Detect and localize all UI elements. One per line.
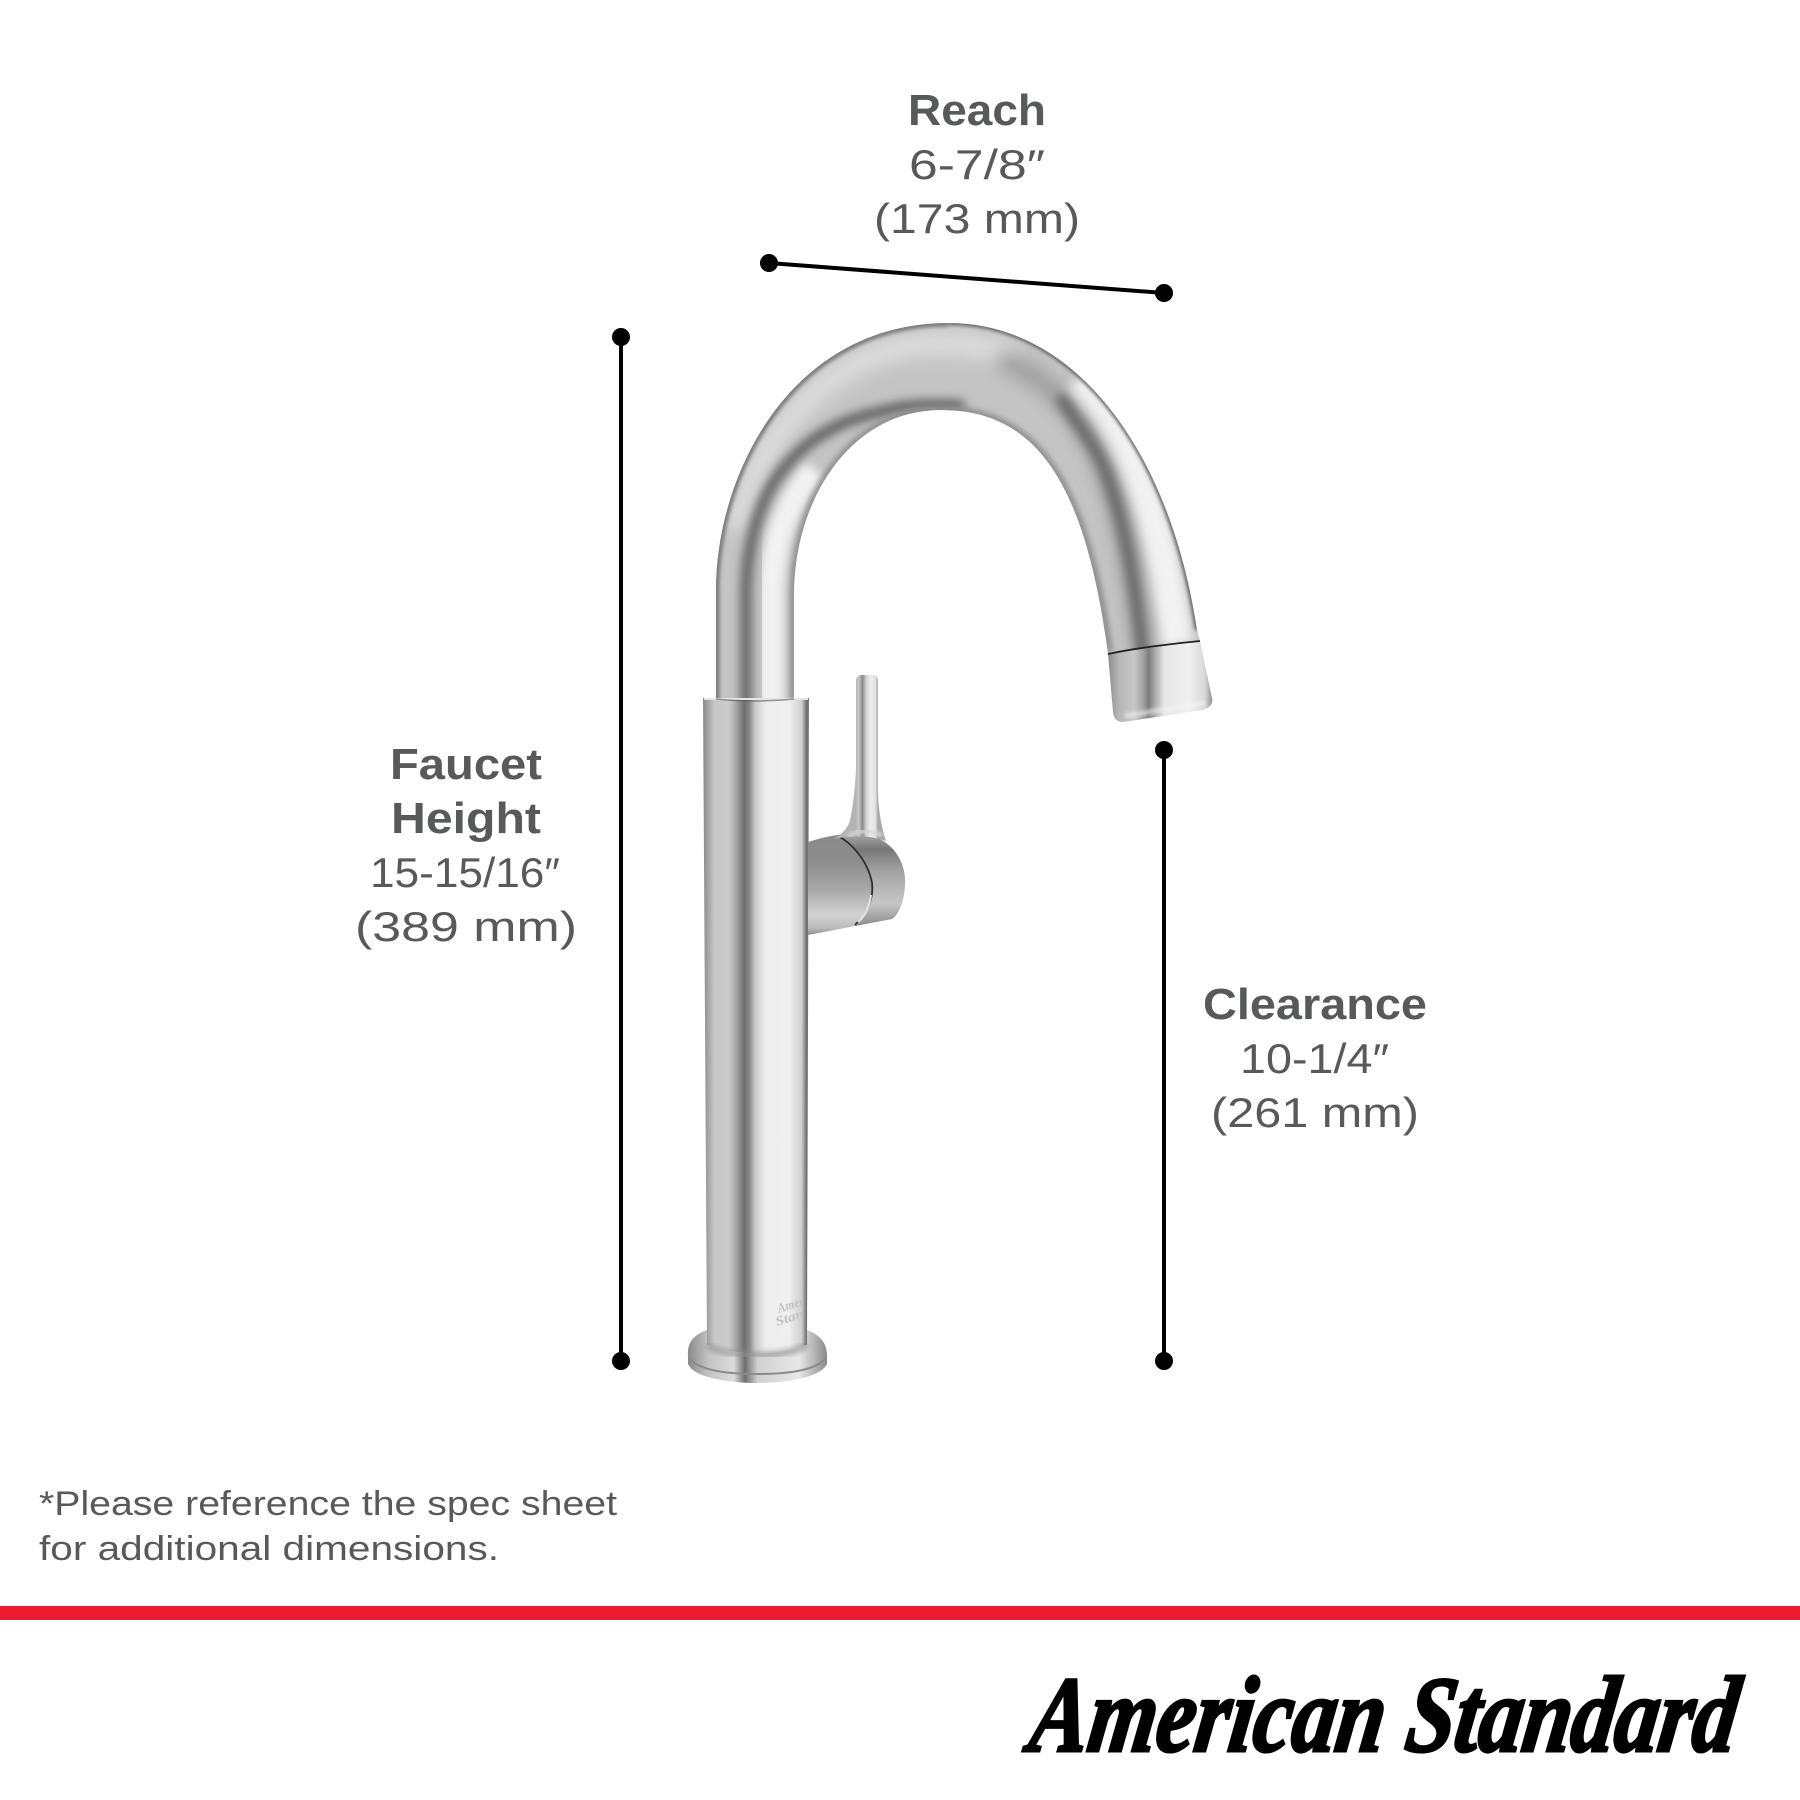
clearance label: [1203, 980, 1427, 1136]
clearance dimension line: [1155, 741, 1173, 1370]
engraved logo on column: Stan: [773, 1306, 806, 1329]
clearance label: 10-1/4″: [1240, 1035, 1389, 1082]
faucet height label: Height: [391, 794, 541, 843]
footnote: [39, 1485, 618, 1568]
faucet column: [703, 698, 809, 1354]
footnote: for additional dimensions.: [39, 1530, 499, 1568]
reach label: Reach: [908, 86, 1046, 135]
spout nozzle: [1108, 641, 1212, 722]
spout: [716, 323, 1200, 698]
reach dimension line: [760, 254, 1173, 302]
red divider bar: [0, 1606, 1800, 1620]
reach label: 6-7/8″: [909, 141, 1045, 188]
clearance label: Clearance: [1203, 980, 1427, 1029]
base flange: [688, 1330, 827, 1383]
reach label: [874, 86, 1080, 242]
engraved logo on column: [773, 1293, 806, 1329]
engraved logo on column: Amer: [774, 1293, 806, 1316]
faucet illustration: [688, 310, 1220, 1383]
clearance label: (261 mm): [1211, 1089, 1419, 1136]
faucet height label: [355, 740, 577, 950]
faucet height label: Faucet: [390, 740, 542, 789]
faucet height dimension line: [612, 328, 630, 1370]
faucet height label: 15-15/16″: [370, 849, 560, 896]
handle body: [808, 834, 905, 935]
faucet height label: (389 mm): [355, 903, 577, 950]
footnote: *Please reference the spec sheet: [39, 1485, 618, 1523]
reach label: (173 mm): [874, 195, 1080, 242]
handle lever: [834, 675, 886, 841]
